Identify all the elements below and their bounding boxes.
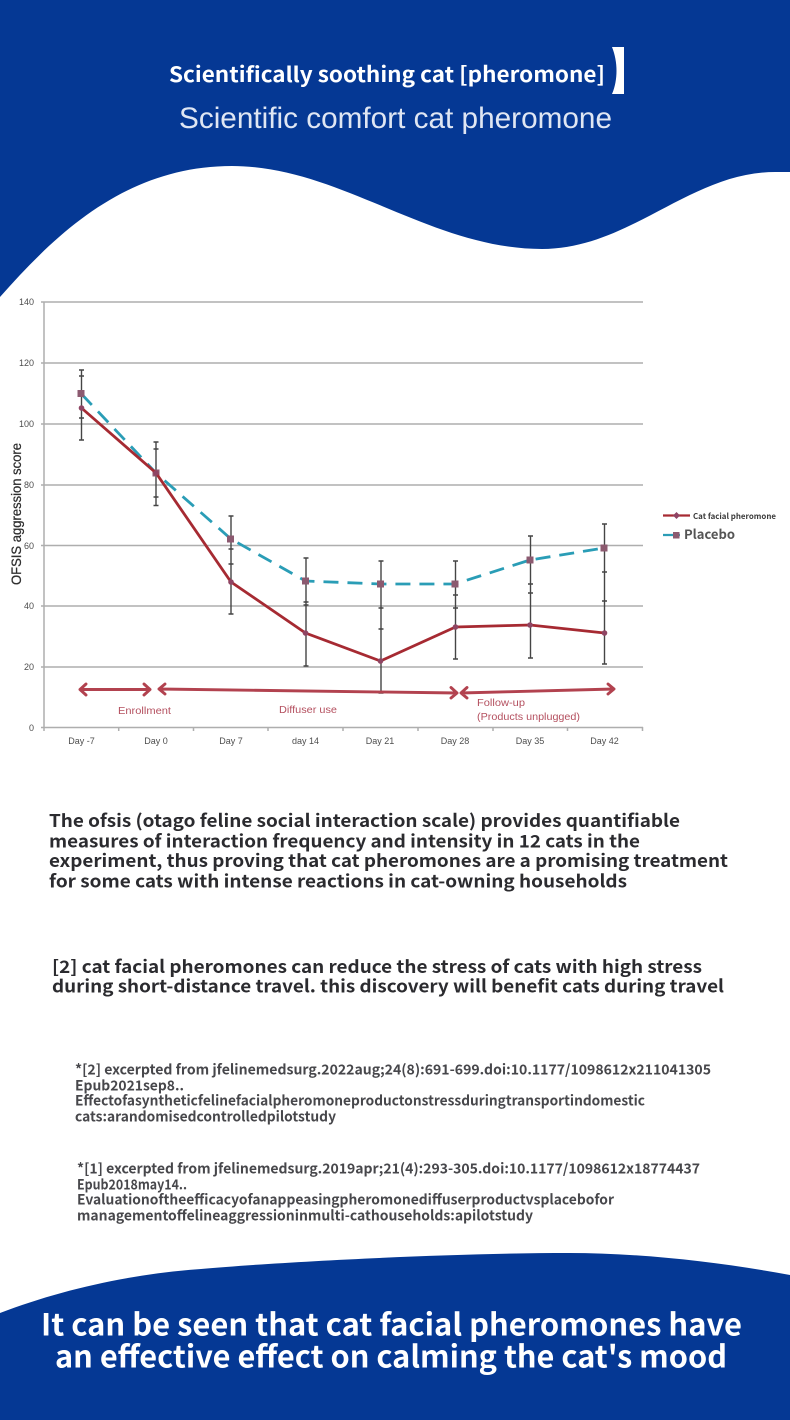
x axis labels: Day 0 bbox=[144, 736, 168, 746]
reference 1 bbox=[77, 1158, 700, 1226]
placebo series bbox=[78, 390, 608, 588]
grid lines and axes bbox=[41, 302, 643, 731]
y axis numbers: 80 bbox=[24, 480, 34, 490]
reference 2: Effectofasyntheticfelinefacialpheromoneproductonstressduringtransportindomestic bbox=[75, 1090, 645, 1110]
icon: closing bracket bbox=[612, 47, 624, 94]
phase labels: (Products unplugged) bbox=[477, 712, 580, 723]
phase labels: Diffuser use bbox=[279, 705, 337, 716]
reference 1: Evaluationoftheefficacyofanappeasingpheromonediffuserproductvsplacebofor bbox=[77, 1190, 615, 1210]
cat facial pheromone series bbox=[79, 405, 607, 664]
error bars bbox=[79, 370, 607, 693]
y axis numbers: 0 bbox=[29, 723, 34, 733]
x axis labels: Day 7 bbox=[219, 736, 243, 746]
conclusion text bbox=[41, 1300, 742, 1376]
reference 2: *[2] excerpted from jfelinemedsurg.2022aug;24(8):691-699.doi:10.1177/1098612x211041305 bbox=[75, 1060, 711, 1080]
title: Scientifically soothing cat [pheromone] bbox=[169, 59, 605, 89]
y axis numbers: 140 bbox=[19, 297, 34, 307]
x axis labels: Day -7 bbox=[68, 736, 95, 746]
travel stress paragraph bbox=[52, 954, 725, 998]
chart legend: Placebo bbox=[684, 524, 735, 543]
reference 1: managementoffelineaggressioninmulti-cathouseholds:apilotstudy bbox=[77, 1206, 533, 1226]
line chart bbox=[9, 297, 643, 746]
x axis labels bbox=[68, 736, 619, 746]
OFSIS explanation paragraph: for some cats with intense reactions in cat-owning households bbox=[49, 868, 627, 894]
phase labels: Follow-up bbox=[477, 698, 525, 709]
y axis numbers: 20 bbox=[24, 662, 34, 672]
conclusion text: It can be seen that cat facial pheromones have bbox=[41, 1300, 742, 1344]
reference 1: Epub2018may14.. bbox=[77, 1174, 187, 1194]
OFSIS explanation paragraph: experiment, thus proving that cat pheromones are a promising treatment bbox=[49, 848, 729, 873]
subtitle: Scientific comfort cat pheromone bbox=[179, 102, 612, 135]
travel stress paragraph: [2] cat facial pheromones can reduce the stress of cats with high stress bbox=[52, 954, 702, 979]
reference 2 bbox=[75, 1060, 711, 1126]
reference 2: Epub2021sep8.. bbox=[75, 1076, 184, 1096]
y axis numbers: 60 bbox=[24, 541, 34, 551]
x axis labels: Day 21 bbox=[366, 736, 394, 746]
OFSIS explanation paragraph bbox=[49, 808, 729, 894]
chart legend bbox=[663, 511, 776, 543]
x axis labels: Day 28 bbox=[441, 736, 469, 746]
y axis numbers: 40 bbox=[24, 601, 34, 611]
bottom footer wave bbox=[0, 1253, 790, 1420]
OFSIS explanation paragraph: The ofsis (otago feline social interaction scale) provides quantifiable bbox=[49, 808, 680, 833]
phase labels: Enrollment bbox=[118, 706, 171, 717]
x axis labels: day 14 bbox=[292, 736, 319, 746]
x axis labels: Day 42 bbox=[590, 736, 619, 746]
phase arrows bbox=[80, 684, 614, 698]
travel stress paragraph: during short-distance travel. this discovery will benefit cats during travel bbox=[52, 974, 725, 998]
y axis title: OFSIS aggression score bbox=[9, 443, 24, 585]
chart legend: Cat facial pheromone bbox=[693, 511, 776, 522]
y axis numbers bbox=[19, 297, 34, 733]
heading block bbox=[169, 47, 624, 135]
reference 1: *[1] excerpted from jfelinemedsurg.2019apr;21(4):293-305.doi:10.1177/1098612x18774437 bbox=[77, 1158, 700, 1178]
OFSIS explanation paragraph: measures of interaction frequency and intensity in 12 cats in the bbox=[49, 828, 640, 854]
reference 2: cats:arandomisedcontrolledpilotstudy bbox=[75, 1106, 336, 1126]
y axis numbers: 100 bbox=[19, 419, 34, 429]
top header wave bbox=[0, 0, 790, 297]
y axis numbers: 120 bbox=[19, 358, 34, 368]
x axis labels: Day 35 bbox=[516, 736, 544, 746]
phase labels bbox=[118, 698, 580, 723]
conclusion text: an effective effect on calming the cat's mood bbox=[55, 1332, 727, 1376]
